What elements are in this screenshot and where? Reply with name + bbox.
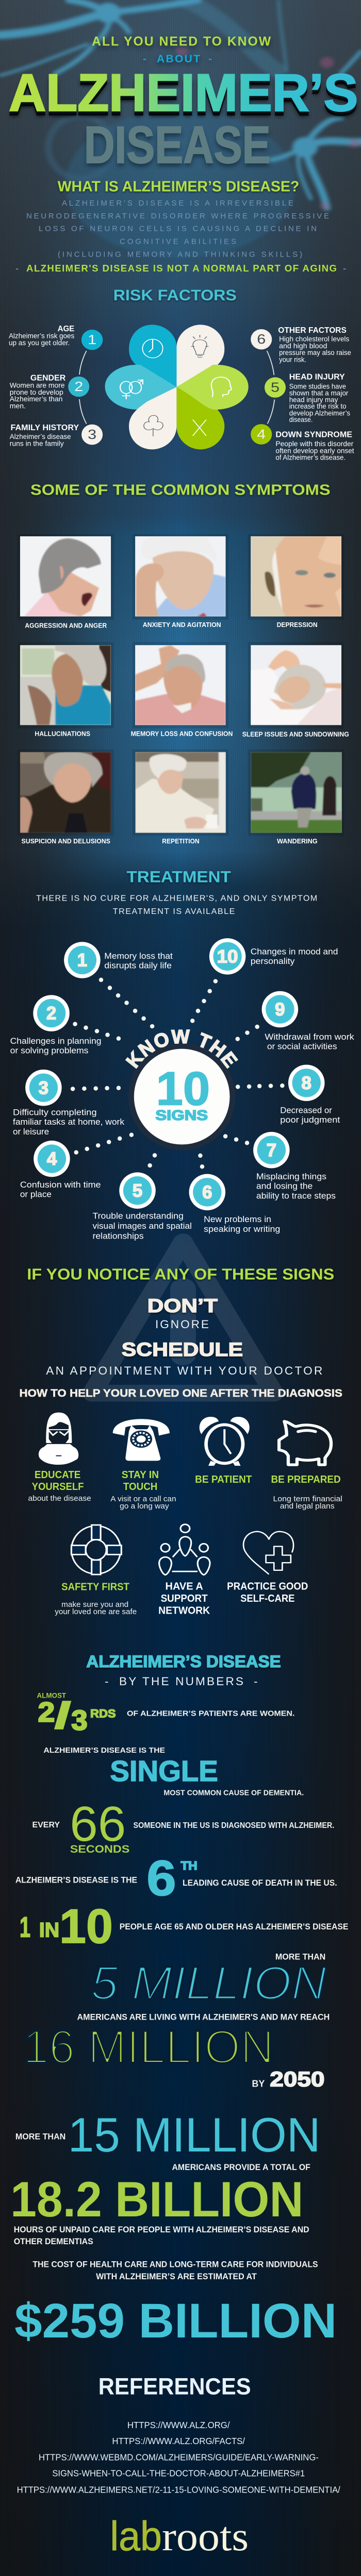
tip: be prepared: and legal plans	[280, 1502, 335, 1511]
sign 5: visual images and spatial	[92, 1222, 192, 1231]
tip: educate yourself: about the disease	[28, 1495, 91, 1503]
photo: depression	[251, 536, 341, 617]
number 3: family history: 3	[88, 427, 96, 442]
caption row two: HALLUCINATIONS	[35, 730, 90, 737]
stat: cost of care: THE COST OF HEALTH CARE AND LONG-TERM CARE FOR INDIVIDUALS	[32, 2259, 318, 2269]
icon: tree	[144, 415, 163, 436]
text block: head injury: disease.	[289, 416, 313, 423]
stat: 1 in 10	[20, 1899, 348, 1953]
tip: stay in touch: TOUCH	[123, 1481, 157, 1493]
text block: other factors: and high blood	[279, 342, 327, 350]
hub: know the 10 signs: SIGNS	[155, 1107, 208, 1123]
text block: definition: ALZHEIMER'S DISEASE IS A IRREVERSIBLE	[62, 199, 293, 208]
tip: stay in touch: A visit or a call can	[110, 1495, 176, 1503]
text block: reference urls: HTTPS://WWW.ALZHEIMERS.NET/2-11-15-LOVING-SOMEONE-WITH-DEMENTIA/	[17, 2484, 340, 2495]
text block: gender: men.	[10, 402, 26, 410]
stat: 16 million by 2050: BY	[252, 2078, 265, 2089]
stat: 15 million: 15 MILLION	[68, 2108, 320, 2162]
tip: have a support network: HAVE A	[166, 1580, 203, 1592]
icon: heart with plus	[243, 1532, 293, 1574]
tip: educate yourself	[28, 1469, 91, 1503]
callout: not a normal part of aging: -	[15, 263, 19, 274]
stat: 1 in 10: IN	[39, 1919, 59, 1942]
tip: have a support network: SUPPORT	[161, 1592, 208, 1604]
logo: labroots: lab	[110, 2513, 162, 2559]
icon: life buoy	[71, 1525, 121, 1574]
sign 8: 8	[302, 1073, 311, 1093]
text block: reference urls: HTTPS://WWW.WEBMD.COM/ALZHEIMERS/GUIDE/EARLY-WARNING-	[39, 2452, 319, 2462]
stat: two thirds women: OF ALZHEIMER’S PATIENTS ARE WOMEN.	[127, 1709, 294, 1718]
caption row three: WANDERING	[277, 837, 318, 845]
text block: gender: Alzheimer’s than	[10, 395, 62, 403]
stat: every 66 seconds	[32, 1797, 334, 1855]
sign 4: 4	[47, 1149, 57, 1169]
tip: safety first	[55, 1581, 137, 1616]
text block: definition	[26, 199, 329, 259]
tip: stay in touch	[110, 1469, 176, 1511]
hero kicker: about: ABOUT	[157, 53, 200, 65]
text block: age: AGE	[58, 324, 74, 333]
hero kicker: about	[143, 53, 212, 65]
icon: support network	[159, 1524, 210, 1575]
stat: two thirds women: ALMOST	[37, 1692, 66, 1700]
sign 4: Confusion with time	[20, 1180, 101, 1190]
main title	[9, 63, 358, 178]
photo: wandering	[251, 752, 342, 833]
caption row one	[25, 621, 318, 629]
panel: if you notice these signs	[20, 1242, 342, 1511]
tip: stay in touch: go a long way	[120, 1502, 169, 1511]
stat: sixth leading cause: ALZHEIMER’S DISEASE IS THE	[15, 1875, 137, 1885]
stat: two thirds women: 2	[38, 1697, 55, 1728]
text block: no cure: THERE IS NO CURE FOR ALZHEIMER'S, AND ONLY SYMPTOM	[36, 893, 317, 903]
stat: 16 million by 2050	[23, 2021, 324, 2091]
stat: 15 million: AMERICANS PROVIDE A TOTAL OF	[172, 2162, 310, 2172]
text block: gender: Women are more	[10, 381, 64, 389]
icon: piggy bank	[279, 1421, 331, 1465]
logo: labroots: roots	[162, 2514, 249, 2560]
heading: references: REFERENCES	[99, 2374, 251, 2400]
callout: not a normal part of aging: -	[343, 263, 346, 274]
caption row three	[22, 837, 318, 845]
heading: if you notice: IF YOU NOTICE ANY OF THESE SIGNS	[27, 1266, 334, 1283]
number 6: other factors: 6	[257, 332, 266, 347]
text: don't: DON’T	[147, 1295, 218, 1317]
text block: definition: (INCLUDING MEMORY AND THINKING SKILLS)	[58, 250, 302, 259]
stat: 15 million: MORE THAN	[15, 2131, 65, 2141]
panel: risk factors	[9, 286, 354, 498]
panel: symptoms photo grid	[17, 534, 349, 845]
stat: cost of care: WITH ALZHEIMER’S ARE ESTIMATED AT	[96, 2272, 257, 2281]
stat: 1 in 10: PEOPLE AGE 65 AND OLDER HAS ALZHEIMER’S DISEASE	[120, 1922, 348, 1931]
text block: definition: LOSS OF NEURON CELLS IS CAUSING A DECLINE IN	[39, 225, 317, 233]
heading: risk factors: RISK FACTORS	[113, 286, 237, 304]
sign 2	[10, 995, 101, 1056]
stat: 18.2 billion: 18.2 BILLION	[10, 2172, 303, 2227]
stat: single most common cause	[43, 1746, 304, 1797]
number 5: head injury: 5	[271, 380, 280, 395]
text block: gender	[10, 373, 66, 410]
text block: reference urls: HTTPS://WWW.ALZ.ORG/FACTS/	[112, 2436, 245, 2446]
stat: sixth leading cause: TH	[180, 1859, 198, 1872]
text block: age: Alzheimer’s risk goes	[9, 332, 74, 340]
sign 6: speaking or writing	[204, 1225, 280, 1234]
caption row three: SUSPICION AND DELUSIONS	[22, 837, 110, 845]
number 5: head injury	[265, 377, 286, 398]
text block: definition: NEURODEGENERATIVE DISORDER WHERE PROGRESSIVE	[26, 212, 329, 221]
tip: be patient: BE PATIENT	[195, 1473, 252, 1485]
stat: 5 million: AMERICANS ARE LIVING WITH ALZHEIMER'S AND MAY REACH	[77, 2012, 330, 2022]
tip: have a support network	[158, 1580, 210, 1616]
icon: telephone	[113, 1419, 170, 1461]
number 1: age: 1	[88, 332, 96, 347]
sign 9: 9	[275, 999, 285, 1020]
text block: family history: FAMILY HISTORY	[11, 423, 79, 432]
text block: head injury: head injury may	[289, 396, 338, 404]
photo: hallucinations	[20, 645, 111, 725]
stat: cost of care	[14, 2259, 337, 2348]
tip: practice good self-care: PRACTICE GOOD	[227, 1580, 308, 1592]
sign 5	[92, 1173, 192, 1241]
number 3: family history	[81, 425, 103, 445]
caption row one: AGGRESSION AND ANGER	[25, 622, 107, 629]
sign 8	[280, 1065, 340, 1125]
sign 7: ability to trace steps	[256, 1191, 336, 1200]
caption row two	[35, 730, 349, 738]
sign 2: Challenges in planning	[10, 1037, 101, 1046]
sign 7	[253, 1132, 336, 1200]
text block: other factors: your risk.	[279, 355, 306, 364]
number 4: down syndrome	[251, 424, 272, 445]
text: ignore: IGNORE	[155, 1318, 209, 1331]
text block: gender: prone to develop	[10, 388, 63, 396]
text: an appointment with your doctor: AN APPOINTMENT WITH YOUR DOCTOR	[46, 1364, 322, 1377]
stat: two thirds women: 3	[71, 1705, 88, 1736]
stat: 18.2 billion: OTHER DEMENTIAS	[14, 2236, 93, 2246]
sign 5: relationships	[92, 1232, 144, 1241]
sign 1: Memory loss that	[104, 952, 173, 961]
text block: reference urls: HTTPS://WWW.ALZ.ORG/	[127, 2420, 230, 2430]
tip: be prepared	[271, 1473, 342, 1511]
tip: be prepared: Long term financial	[273, 1495, 342, 1503]
sign 7: Misplacing things	[256, 1172, 326, 1181]
stat: 5 million	[77, 1952, 330, 2022]
stat: single most common cause: MOST COMMON CAUSE OF DEMENTIA.	[163, 1788, 304, 1797]
sign 6: 6	[202, 1182, 212, 1202]
sign 6	[189, 1174, 280, 1234]
text block: no cure	[36, 893, 317, 916]
text block: gender: GENDER	[30, 373, 66, 382]
tip: have a support network: NETWORK	[158, 1604, 210, 1616]
callout: not a normal part of aging: ALZHEIMER'S DISEASE IS NOT A NORMAL PART OF AGING	[26, 263, 337, 274]
tip: safety first: your loved one are safe	[55, 1607, 137, 1616]
tip: safety first: make sure you and	[61, 1600, 128, 1609]
photo backing shadows	[17, 534, 344, 836]
sign 3: or leisure	[13, 1127, 49, 1137]
sign 6: New problems in	[204, 1215, 271, 1224]
caption row three: REPETITION	[162, 837, 200, 845]
hero kicker: about: -	[208, 53, 212, 65]
stat: single most common cause: ALZHEIMER’S DISEASE IS THE	[43, 1746, 165, 1755]
stat: 15 million	[15, 2108, 320, 2172]
text: schedule: SCHEDULE	[122, 1338, 243, 1360]
tip: safety first: SAFETY FIRST	[61, 1581, 129, 1592]
stat: 1 in 10: 1	[20, 1911, 30, 1943]
arcs: number connectors	[79, 351, 274, 423]
stat: cost of care: $259 BILLION	[14, 2294, 337, 2348]
icon: warning triangle watermark	[92, 1242, 274, 1393]
tip: be prepared: BE PREPARED	[271, 1473, 341, 1485]
text block: no cure: TREATMENT IS AVAILABLE	[113, 907, 235, 916]
text: by the numbers: -	[105, 1675, 109, 1688]
number 6: other factors	[251, 329, 272, 349]
icon: head profile	[211, 377, 232, 397]
photo: aggression and anger	[20, 536, 111, 617]
text block: reference urls	[17, 2420, 340, 2495]
chart: six petal flower	[105, 325, 249, 449]
sign 9	[262, 991, 354, 1052]
sign 3: Difficulty completing	[13, 1108, 97, 1117]
text block: head injury	[289, 372, 350, 423]
photo: memory loss and confusion	[135, 645, 226, 725]
sign 3	[13, 1070, 125, 1137]
caption row one: ANXIETY AND AGITATION	[143, 621, 221, 629]
sign 2: 2	[46, 1004, 56, 1024]
text: by the numbers: BY THE NUMBERS	[119, 1675, 243, 1688]
photo: anxiety and agitation	[135, 536, 226, 617]
number 2: gender	[68, 377, 89, 397]
icon: educate woman at laptop	[39, 1413, 78, 1465]
text block: age: up as you get older.	[9, 338, 70, 347]
caption row two: MEMORY LOSS AND CONFUSION	[131, 730, 233, 737]
text block: family history: Alzheimer’s disease	[10, 433, 71, 440]
hero kicker: about: -	[143, 53, 146, 65]
hero kicker: all you need to know: ALL YOU NEED TO KNOW	[92, 35, 271, 49]
icon: clock	[142, 339, 163, 358]
text block: age	[9, 324, 74, 347]
hub: know the 10 signs: 10	[156, 1062, 210, 1115]
tip: practice good self-care: SELF-CARE	[240, 1592, 294, 1604]
sign 3: familiar tasks at home, work	[13, 1117, 125, 1127]
sign 10: Changes in mood and	[251, 947, 338, 956]
photo: repetition	[136, 752, 226, 833]
stat: two thirds women: /	[55, 1696, 70, 1735]
number 1: age	[81, 330, 103, 350]
heading: alzheimer's disease by the numbers: ALZHEIMER’S DISEASE	[86, 1653, 281, 1671]
stat: 5 million: MORE THAN	[275, 1952, 325, 1961]
stat: sixth leading cause	[15, 1851, 337, 1906]
stat: two thirds women	[37, 1692, 294, 1736]
sign 4	[20, 1141, 101, 1199]
stat: sixth leading cause: LEADING CAUSE OF DEATH IN THE US.	[183, 1878, 337, 1888]
stat: every 66 seconds: SECONDS	[70, 1843, 129, 1855]
icon: alarm clock	[200, 1417, 250, 1466]
text block: family history	[10, 423, 79, 448]
photo: suspicion and delusions	[20, 752, 111, 833]
panel: hero neuron artwork	[0, 0, 361, 258]
hub: know the 10 signs	[125, 1029, 238, 1150]
stat: single most common cause: SINGLE	[110, 1754, 218, 1787]
sign 1: disrupts daily life	[104, 961, 172, 971]
stat: 16 million by 2050: 2050	[270, 2068, 324, 2091]
caption row one: DEPRESSION	[277, 621, 318, 629]
sign 5: 5	[133, 1181, 142, 1201]
sign 1: 1	[77, 951, 87, 971]
panel: costs, references and logo	[10, 2172, 340, 2560]
text: by the numbers: -	[254, 1675, 258, 1688]
sign 9: Withdrawal from work	[265, 1032, 354, 1042]
stat: 18.2 billion: HOURS OF UNPAID CARE FOR PEOPLE WITH ALZHEIMER’S DISEASE AND	[14, 2225, 309, 2234]
stat: every 66 seconds: 66	[70, 1797, 126, 1851]
panel: treatment and ten signs	[10, 868, 354, 1241]
tip: educate yourself: EDUCATE	[35, 1469, 80, 1481]
icon: light bulb	[191, 335, 208, 358]
sign 10: personality	[251, 957, 295, 966]
sign 7: 7	[267, 1140, 276, 1160]
number 4: down syndrome: 4	[257, 427, 266, 442]
sign 1	[64, 942, 173, 978]
logo: labroots	[110, 2513, 249, 2560]
sign 10	[209, 938, 338, 975]
stat: two thirds women: RDS	[90, 1707, 116, 1720]
tip: stay in touch: STAY IN	[122, 1469, 159, 1481]
stat: 5 million: 5 MILLION	[91, 1957, 327, 2010]
hub: know the 10 signs: KNOW THE	[125, 1029, 238, 1069]
stat: 16 million by 2050: 16 MILLION	[23, 2021, 274, 2074]
text block: down syndrome	[275, 430, 354, 462]
photo: sleep issues and sundowning	[251, 645, 341, 725]
text block: reference urls: SIGNS-WHEN-TO-CALL-THE-DOCTOR-ABOUT-ALZHEIMERS#1	[52, 2468, 305, 2479]
tip: practice good self-care	[227, 1580, 308, 1604]
sign 9: or social activities	[267, 1042, 337, 1052]
panel: statistics	[15, 1797, 348, 2172]
stat: every 66 seconds: EVERY	[32, 1821, 60, 1829]
sign 7: and losing the	[256, 1182, 313, 1191]
sign 2: or solving problems	[10, 1046, 88, 1056]
number 2: gender: 2	[74, 379, 83, 394]
heading: what is alzheimer's disease: WHAT IS ALZHEIMER’S DISEASE?	[58, 178, 299, 195]
text block: other factors	[278, 326, 351, 364]
text block: definition: COGNITIVE ABILITIES	[120, 238, 236, 246]
heading: treatment: TREATMENT	[127, 868, 231, 886]
stat: every 66 seconds: SOMEONE IN THE US IS DIAGNOSED WITH ALZHEIMER.	[133, 1821, 334, 1830]
sign 8: Decreased or	[280, 1106, 332, 1115]
caption row two: SLEEP ISSUES AND SUNDOWNING	[242, 731, 349, 738]
stat: 1 in 10: 10	[59, 1899, 113, 1953]
panel: more tips and numbers heading	[37, 1524, 308, 1797]
sign 4: or place	[20, 1190, 52, 1199]
sign 5: Trouble understanding	[92, 1212, 184, 1221]
sign 8: poor judgment	[280, 1115, 340, 1125]
tip: educate yourself: YOURSELF	[32, 1481, 84, 1493]
dots: connectors	[71, 978, 285, 1169]
sign 10: 10	[217, 946, 238, 967]
icon: gender symbols	[120, 380, 143, 399]
text block: family history: runs in the family	[10, 439, 64, 448]
stat: sixth leading cause: 6	[146, 1851, 176, 1906]
sign 3: 3	[39, 1078, 48, 1098]
icon: x chromosome	[193, 420, 206, 435]
